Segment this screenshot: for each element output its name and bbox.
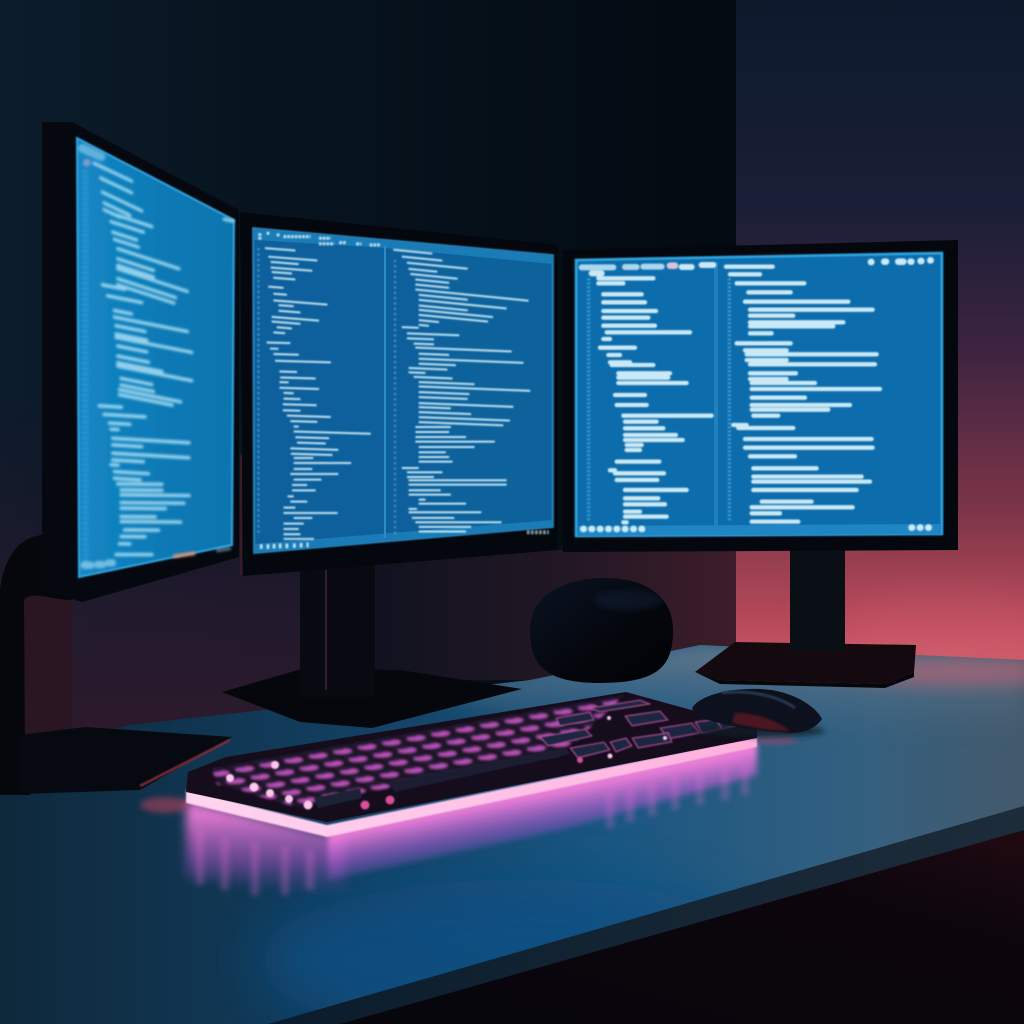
wall: red glow near the desk xyxy=(820,600,1024,680)
right monitor screen xyxy=(576,253,942,536)
mouse xyxy=(692,689,825,737)
keyboard light bar xyxy=(186,737,757,837)
keyboard space bar xyxy=(388,748,570,792)
keyboard nav and function keys xyxy=(540,700,737,758)
wall: right wall with red glow xyxy=(736,0,1024,680)
center monitor pane divider xyxy=(384,246,386,538)
center monitor code lines xyxy=(258,233,549,547)
keyboard xyxy=(186,692,757,837)
keyboard front row keys xyxy=(314,788,362,808)
monitor: left xyxy=(42,122,239,602)
monitor stand: center neck and base xyxy=(222,565,522,728)
center monitor screen xyxy=(253,228,553,553)
wall: lower left purple wash xyxy=(0,380,300,740)
right monitor pane divider xyxy=(714,262,718,532)
center monitor frame xyxy=(240,212,558,576)
desk: surface xyxy=(0,640,1024,1024)
center monitor top bar xyxy=(254,229,553,264)
wall: left dark wall xyxy=(0,0,738,760)
keyboard body xyxy=(186,692,757,822)
speaker: round black device xyxy=(530,578,673,683)
center monitor bottom bar xyxy=(254,520,553,553)
keyboard key grid xyxy=(212,695,625,808)
monitor stand: left arm and base xyxy=(0,535,232,795)
wall: lit section between monitors xyxy=(370,550,738,680)
left monitor screen xyxy=(77,138,234,577)
monitor: right xyxy=(563,240,958,552)
right monitor frame xyxy=(563,240,958,552)
desk: under-desk shadow xyxy=(268,806,1024,1024)
keyboard bright key lights xyxy=(226,716,667,810)
right monitor code lines xyxy=(582,260,937,529)
left monitor code lines xyxy=(82,148,233,565)
right monitor bottom bar xyxy=(577,524,941,536)
desk: front edge xyxy=(250,800,1024,1024)
keyboard glow reflection on desk xyxy=(140,736,797,895)
monitor stand: right neck and base xyxy=(695,548,916,688)
monitor: center xyxy=(240,212,558,576)
left monitor frame xyxy=(42,122,239,602)
